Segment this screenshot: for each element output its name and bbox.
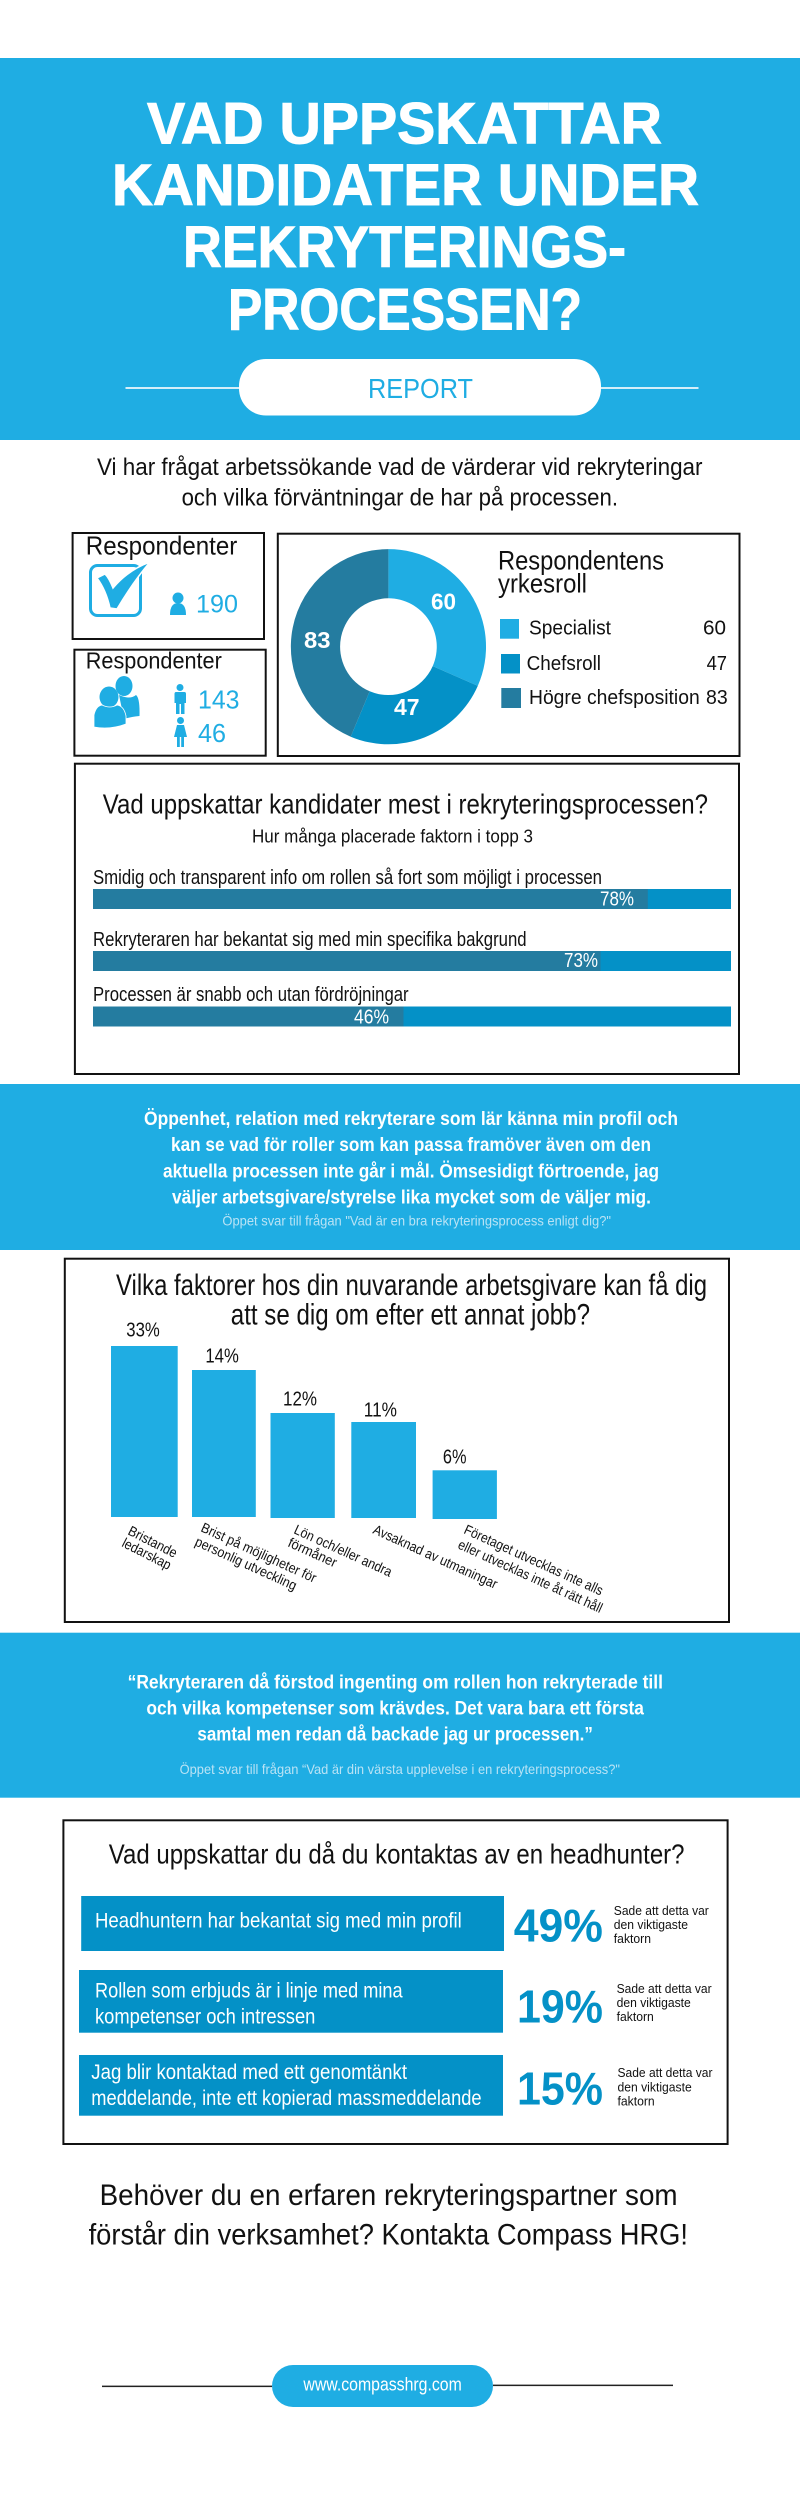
legend: 60 <box>703 617 726 639</box>
intro text: Vi har frågat arbetssökande vad de värderar vid rekryteringar <box>97 454 702 481</box>
panel heading: Vad uppskattar kandidater mest i rekryteringsprocessen? <box>103 788 708 819</box>
website pill with rule <box>102 2365 673 2407</box>
panel: respondents by gender: 46 <box>198 720 226 748</box>
bar: specific background 73% <box>93 929 731 972</box>
legend: 47 <box>707 653 727 675</box>
rotated axis labels: förmåner <box>286 1534 340 1570</box>
title: VAD UPPSKATTAR <box>147 92 662 157</box>
legend: 83 <box>706 687 728 709</box>
stat: 15% <box>79 2055 713 2116</box>
bar: transparent info 78% <box>93 867 731 911</box>
panel: respondents by gender <box>74 648 266 756</box>
quote band: worst experience <box>0 1633 800 1798</box>
header banner <box>0 58 800 440</box>
panel: respondents by gender: 143 <box>198 686 240 714</box>
quote text: och vilka kompetenser som krävdes. Det vara bara ett första <box>146 1699 644 1720</box>
bar chart: 6% <box>443 1447 467 1469</box>
panel heading: att se dig om efter ett annat jobb? <box>231 1298 590 1331</box>
bar: fast process 46%: Processen är snabb och utan fördröjningar <box>93 984 409 1006</box>
bar chart: 14% <box>205 1346 239 1368</box>
stat: 19%: den viktigaste <box>617 1995 691 2010</box>
title: KANDIDATER UNDER <box>112 153 699 218</box>
legend title: Respondentens <box>498 545 664 575</box>
intro text: och vilka förväntningar de har på processen. <box>182 485 618 512</box>
panel: respondents total: 190 <box>196 591 238 619</box>
bar: fast process 46% <box>93 984 731 1029</box>
rotated axis labels: Lön och/eller andra <box>292 1521 395 1580</box>
stat: 19% <box>79 1970 712 2033</box>
intro text <box>97 454 702 512</box>
rotated axis labels: Avsaknad av utmaningar <box>371 1521 500 1592</box>
quote source: Öppet svar till frågan "Vad är en bra rekryteringsprocess enligt dig?" <box>222 1211 611 1228</box>
rotated axis labels: Företaget utvecklas inte alls <box>462 1521 606 1598</box>
legend: Högre chefsposition <box>529 687 700 709</box>
stat: 15%: Jag blir kontaktad med ett genomtänkt <box>91 2061 407 2084</box>
legend title: yrkesroll <box>498 568 587 598</box>
legend: Chefsroll <box>527 653 601 675</box>
bar: specific background 73%: 73% <box>564 950 598 972</box>
quote text: samtal men redan då backade jag ur processen.” <box>197 1725 593 1746</box>
quote text: väljer arbetsgivare/styrelse lika mycket som de väljer mig. <box>172 1187 651 1208</box>
rotated axis labels <box>120 1519 606 1616</box>
stat: 49%: Sade att detta var <box>614 1903 709 1918</box>
legend: Specialist <box>529 617 611 639</box>
panel subheading: Hur många placerade faktorn i topp 3 <box>252 827 533 847</box>
donut chart: 83 <box>304 627 330 653</box>
quote text <box>128 1672 663 1746</box>
bar: fast process 46%: 46% <box>354 1007 389 1029</box>
title <box>112 92 699 342</box>
title: PROCESSEN? <box>228 277 582 342</box>
quote text: kan se vad för roller som kan passa framöver även om den <box>171 1135 651 1156</box>
rotated axis labels: ledarskap <box>120 1534 174 1573</box>
stat: 15%: 15% <box>517 2063 603 2115</box>
stat: 19%: Sade att detta var <box>617 1981 712 1996</box>
icon: man <box>174 684 186 714</box>
report pill with rule: REPORT <box>368 373 473 404</box>
stat: 49%: Headhuntern har bekantat sig med min profil <box>95 1909 462 1932</box>
bar chart: 12% <box>283 1389 317 1411</box>
stat: 49%: 49% <box>514 1900 603 1952</box>
bar chart: 11% <box>364 1400 397 1422</box>
quote text <box>144 1109 678 1208</box>
stat: 15%: den viktigaste <box>618 2079 692 2094</box>
icon: group of people <box>94 676 140 728</box>
icon: woman <box>174 717 187 747</box>
panel: respondents total: Respondenter <box>86 530 238 560</box>
panel: reasons to look for another job <box>65 1259 729 1622</box>
icon: person <box>170 592 186 615</box>
quote band: openness <box>0 1084 800 1250</box>
rotated axis labels: eller utvecklas inte åt rätt håll <box>456 1536 605 1616</box>
call to action <box>89 2179 688 2251</box>
stat: 15%: meddelande, inte ett kopierad massmeddelande <box>91 2087 482 2110</box>
stat: 49%: den viktigaste <box>614 1917 688 1932</box>
website pill with rule: www.compasshrg.com <box>303 2375 462 2395</box>
quote text: “Rekryteraren då förstod ingenting om rollen hon rekryterade till <box>128 1672 663 1693</box>
panel: what candidates value most <box>75 764 739 1074</box>
donut chart: 60 <box>431 588 456 614</box>
rotated axis labels: personlig utveckling <box>193 1533 299 1593</box>
rotated axis labels: Brist på möjligheter för <box>199 1519 319 1586</box>
stat: 15%: faktorn <box>618 2093 655 2108</box>
stat: 19%: Rollen som erbjuds är i linje med mina <box>95 1979 403 2002</box>
rotated axis labels: Bristande <box>126 1522 180 1561</box>
panel heading <box>116 1269 707 1331</box>
panel: headhunter contact <box>63 1820 728 2144</box>
quote text: aktuella processen inte går i mål. Ömsesidigt förtroende, jag <box>163 1161 659 1182</box>
donut chart: 47 <box>394 694 420 720</box>
report pill with rule <box>126 359 698 416</box>
donut chart <box>291 549 486 744</box>
panel: respondent job role <box>278 534 740 756</box>
title: REKRYTERINGS- <box>183 215 626 280</box>
stat: 15%: Sade att detta var <box>618 2065 713 2080</box>
panel: respondents by gender: Respondenter <box>86 648 222 674</box>
stat: 49%: faktorn <box>614 1931 651 1946</box>
panel: respondents total <box>73 530 264 639</box>
stat: 49% <box>81 1896 709 1952</box>
bar: specific background 73%: Rekryteraren har bekantat sig med min specifika bakgrund <box>93 929 527 951</box>
bar: transparent info 78%: Smidig och transparent info om rollen så fort som möjligt i processen <box>93 867 602 889</box>
stat: 19%: 19% <box>517 1981 603 2033</box>
call to action: Behöver du en erfaren rekryteringspartner som <box>100 2179 678 2212</box>
bar chart <box>111 1320 497 1519</box>
legend title <box>498 545 664 598</box>
call to action: förstår din verksamhet? Kontakta Compass HRG! <box>89 2218 688 2251</box>
stat: 19%: kompetenser och intressen <box>95 2005 315 2028</box>
bar chart: 33% <box>126 1320 160 1342</box>
panel heading: Vad uppskattar du då du kontaktas av en headhunter? <box>109 1838 685 1869</box>
quote source: Öppet svar till frågan “Vad är din värsta upplevelse i en rekryteringsprocess?" <box>180 1760 620 1777</box>
stat: 19%: faktorn <box>617 2009 654 2024</box>
legend <box>500 617 728 709</box>
icon: checkbox <box>90 562 150 616</box>
bar: transparent info 78%: 78% <box>600 889 634 911</box>
quote text: Öppenhet, relation med rekryterare som lär känna min profil och <box>144 1109 678 1130</box>
